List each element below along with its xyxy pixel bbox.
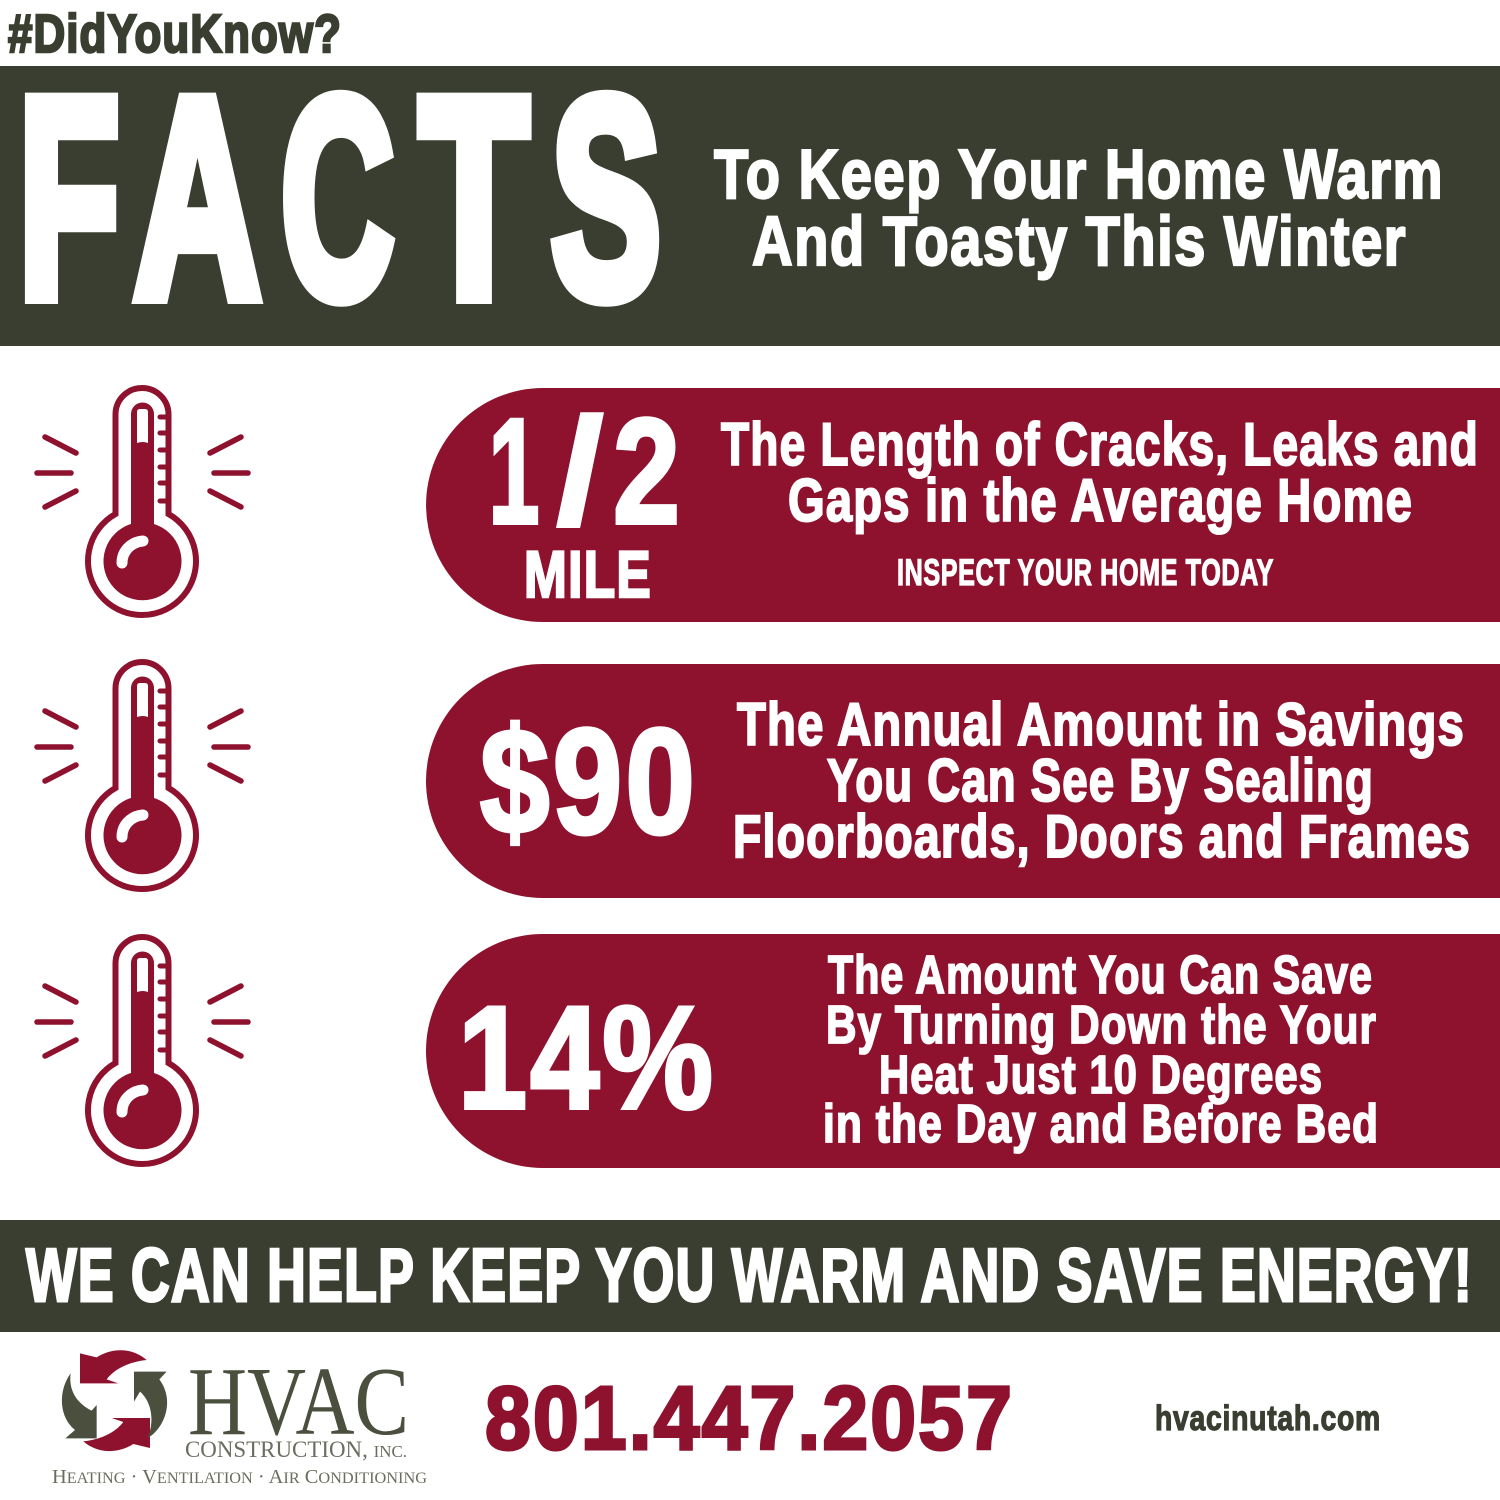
phone number: 801.447.2057 [485, 1369, 1014, 1469]
stat: 1/2 mile [488, 387, 680, 611]
stat: 1/2 mile: 1 [488, 387, 540, 555]
logo line: construction: CONSTRUCTION, INC. [185, 1437, 407, 1462]
fact text three: Heat Just 10 Degrees [879, 1045, 1323, 1105]
panel: fact two [426, 664, 1500, 898]
stat: 1/2 mile: MILE [524, 537, 652, 611]
stat: $90: $90 [480, 697, 698, 865]
panel: fact three [426, 934, 1500, 1168]
icon: thermometer 3 [37, 937, 248, 1164]
icon: thermometer 2 [37, 662, 248, 889]
logo wordmark HVAC: HVAC [188, 1348, 409, 1456]
icon: thermometer 1 [37, 388, 248, 615]
title: FACTS [18, 40, 661, 357]
panel: fact one [426, 387, 1500, 622]
website: hvacinutah.com [1155, 1399, 1381, 1438]
subtitle [714, 135, 1444, 280]
logo: HVAC Construction [52, 1348, 427, 1488]
stat: 1/2 mile: / [557, 387, 603, 555]
stat: 1/2 mile: 2 [613, 387, 680, 555]
title: FACTS: T [420, 40, 528, 357]
panel: header banner [0, 40, 1500, 357]
title: FACTS: S [551, 40, 661, 357]
fact text one: INSPECT YOUR HOME TODAY [897, 552, 1274, 593]
hashtag heading: #DidYouKnow? [8, 4, 342, 64]
panel: call to action banner [0, 1220, 1500, 1332]
fact text one [721, 411, 1479, 593]
icon: circular arrows [62, 1350, 167, 1451]
fact text two [733, 691, 1471, 870]
title: FACTS: A [134, 40, 261, 357]
logo tagline: HEATING · VENTILATION · AIR CONDITIONING [52, 1466, 427, 1488]
fact text three [823, 945, 1379, 1154]
stat: 14%: 14% [458, 976, 716, 1139]
title: FACTS: F [18, 40, 119, 357]
title: FACTS: C [281, 40, 394, 357]
